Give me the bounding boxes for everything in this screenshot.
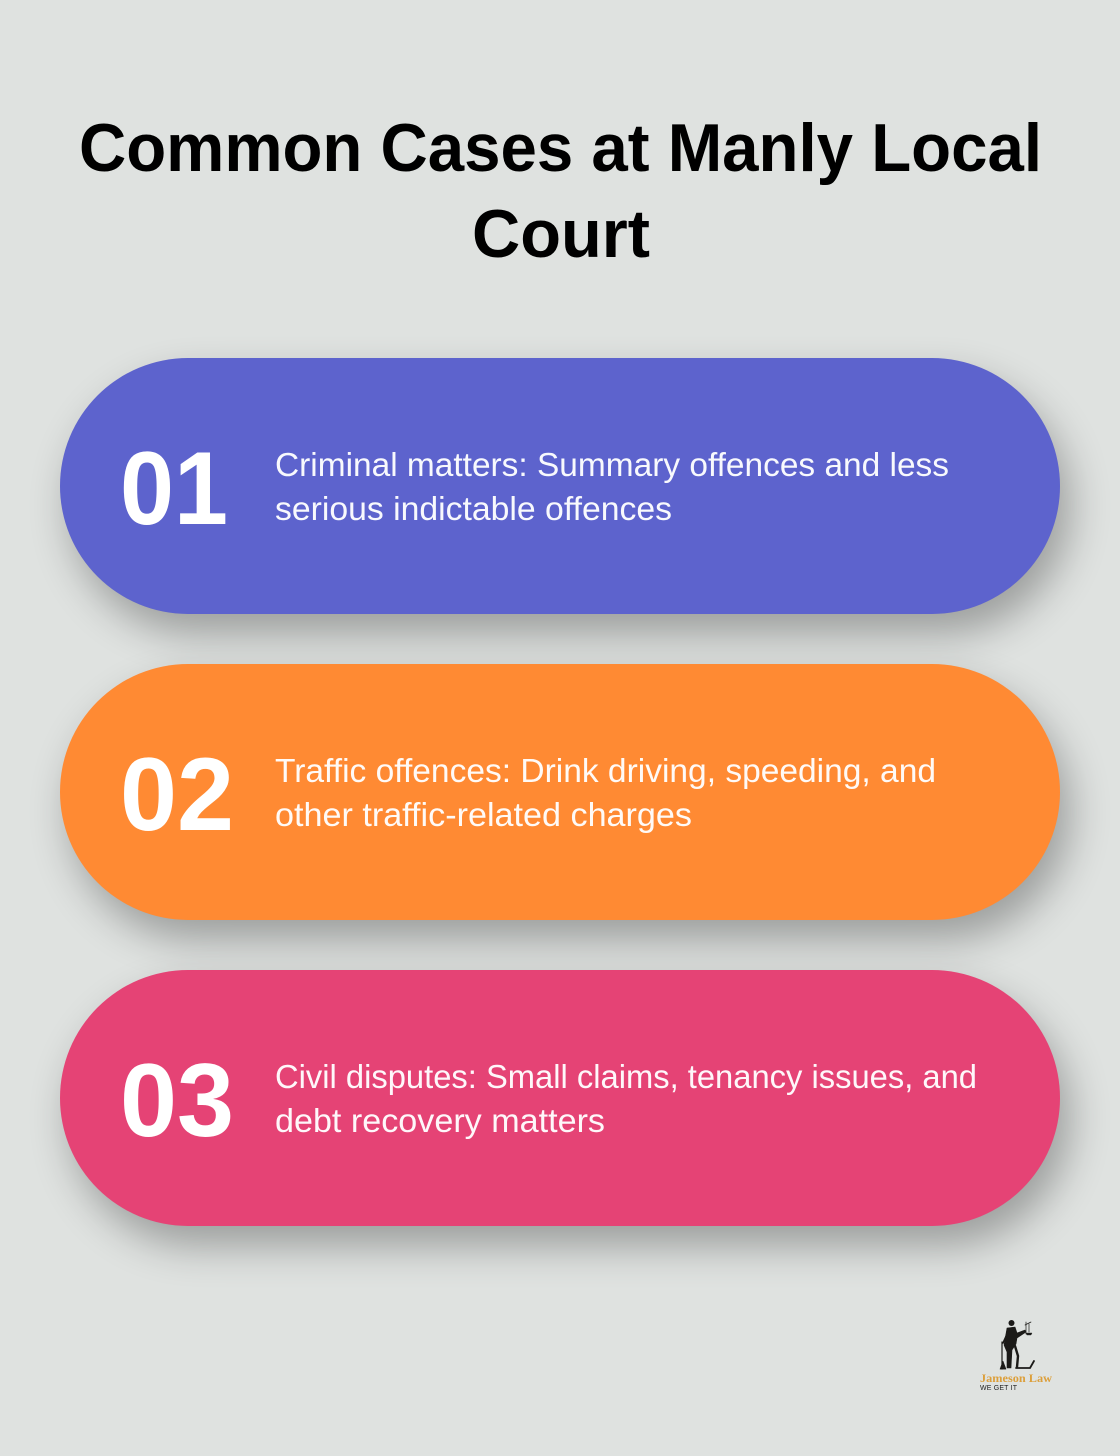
item 01 number and text: Criminal matters: Summary offences and less [275, 447, 949, 484]
item 03 number and text: Civil disputes: Small claims, tenancy issues, and [275, 1059, 977, 1096]
item 02 number and text [120, 737, 936, 853]
title: Court [472, 196, 650, 272]
panel: civil disputes pill [60, 970, 1060, 1226]
title: Common Cases at Manly Local [79, 110, 1042, 186]
logo tagline: WE GET IT [980, 1385, 1018, 1392]
title [79, 110, 1042, 272]
item 01 number and text [120, 431, 949, 547]
item 03 number and text: debt recovery matters [275, 1103, 605, 1140]
item 01 number and text: serious indictable offences [275, 491, 672, 528]
logo: Jameson Law [980, 1320, 1052, 1392]
item 03 number and text: 03 [120, 1043, 234, 1159]
item 01 number and text: 01 [120, 431, 228, 547]
item 02 number and text: 02 [120, 737, 234, 853]
item 02 number and text: other traffic-related charges [275, 797, 692, 834]
item 03 number and text [120, 1043, 977, 1159]
panel: criminal matters pill [60, 358, 1060, 614]
logo wordmark: Jameson Law [980, 1371, 1052, 1385]
icon: lady justice figure [1000, 1320, 1034, 1369]
panel: traffic offences pill [60, 664, 1060, 920]
item 02 number and text: Traffic offences: Drink driving, speeding, and [275, 753, 936, 790]
